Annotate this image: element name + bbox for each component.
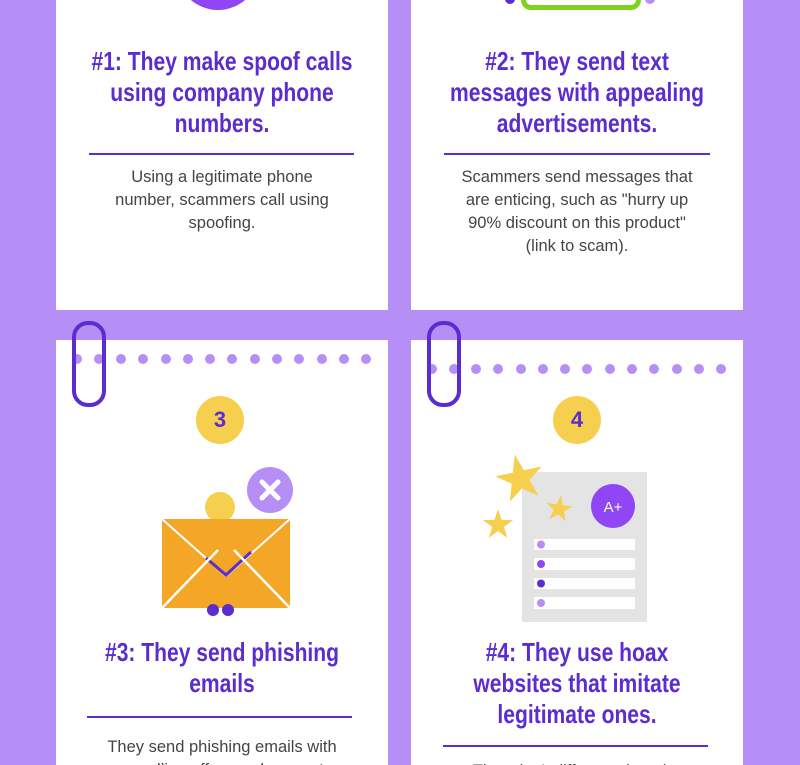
heading 4: #4: They use hoax: [486, 637, 668, 667]
body 1: spoofing.: [189, 214, 255, 232]
number 4: 4: [571, 407, 583, 432]
dots row: [431, 364, 726, 374]
body 1: number, scammers call using: [115, 191, 329, 209]
heading 1: [91, 46, 353, 138]
panel: card 4: [411, 340, 743, 765]
body 2: 90% discount on this product": [468, 214, 686, 232]
icon: paperclip 3: [72, 321, 106, 407]
icon: graded document with stars: [482, 454, 647, 622]
heading 1: numbers.: [175, 108, 269, 138]
body 2: Scammers send messages that: [461, 168, 693, 186]
heading 2: [450, 46, 704, 138]
icon: paperclip 4: [427, 321, 461, 407]
heading 3: [105, 637, 339, 698]
icon: graded document with stars: A+: [604, 499, 623, 516]
body 2: are enticing, such as "hurry up: [466, 191, 688, 209]
number 3: [196, 396, 244, 444]
panel: card 2: [411, 0, 743, 310]
panel: card 1: [56, 0, 388, 310]
body 2: (link to scam).: [526, 237, 628, 255]
heading 3: emails: [189, 668, 255, 698]
heading 4: [473, 637, 681, 729]
body 1: [115, 168, 329, 232]
heading 3: #3: They send phishing: [105, 637, 339, 667]
heading 2: advertisements.: [497, 108, 657, 138]
body 1: Using a legitimate phone: [131, 168, 313, 186]
icon: envelope: [162, 467, 293, 616]
body 3: They send phishing emails with: [107, 738, 337, 756]
heading 1: using company phone: [110, 77, 334, 107]
heading 1: #1: They make spoof calls: [91, 46, 353, 76]
number 4: [553, 396, 601, 444]
heading 2: #2: They send text: [485, 46, 669, 76]
icon: message: [505, 0, 655, 10]
heading 2: messages with appealing: [450, 77, 704, 107]
number 3: 3: [214, 407, 226, 432]
dots row: [76, 354, 371, 364]
body 2: [461, 168, 693, 255]
heading 4: websites that imitate: [473, 668, 681, 698]
body 3: [107, 738, 337, 765]
heading 4: legitimate ones.: [497, 699, 657, 729]
panel: card 3: [56, 340, 388, 765]
icon: phone circle: [176, 0, 260, 10]
